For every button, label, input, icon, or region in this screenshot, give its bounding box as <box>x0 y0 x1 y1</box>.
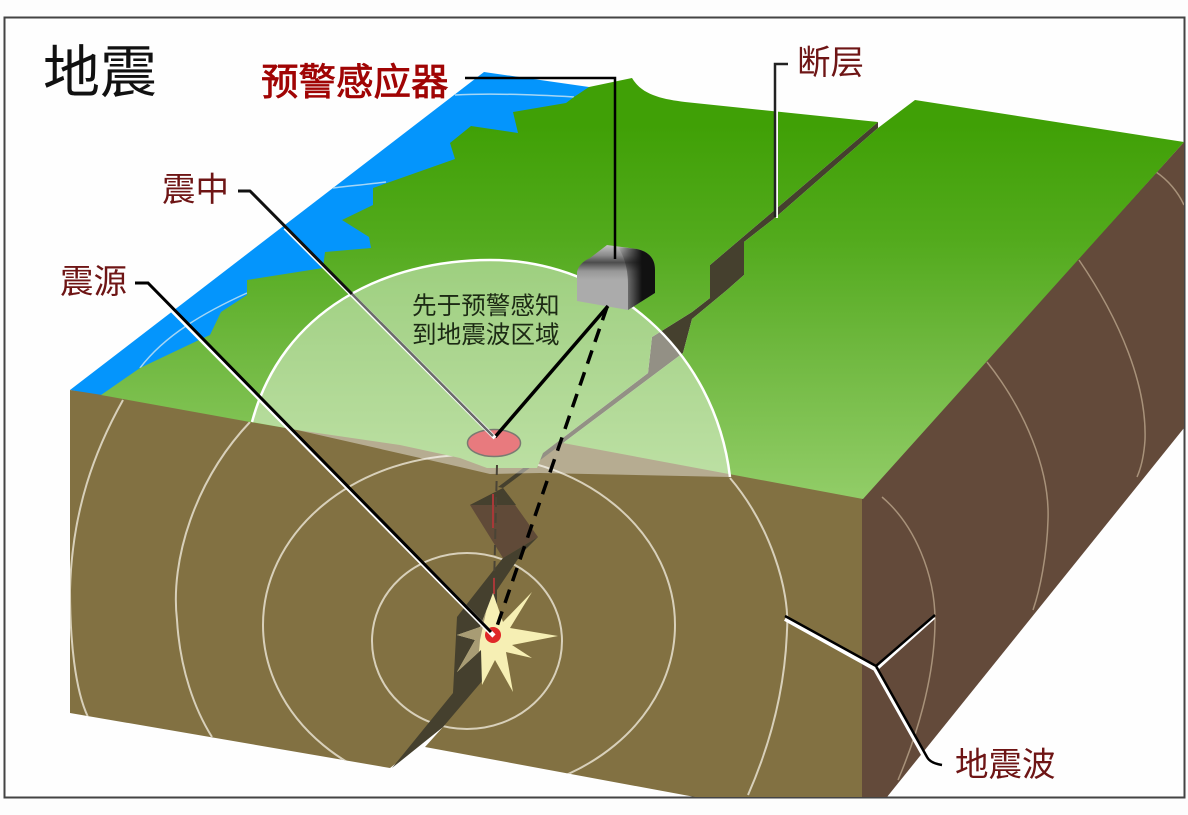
line: sensor to hypocentre dashed <box>495 307 607 632</box>
label: fault: 断层 <box>797 45 864 82</box>
panel: right ground surface <box>563 100 1184 499</box>
label: warning zone: 先于预警感知 <box>412 292 560 320</box>
hypocentre to epicentre projection <box>493 465 497 625</box>
panel: front soil face <box>70 390 862 797</box>
seismic waves on front face <box>70 400 787 795</box>
fault wall on surface <box>498 122 878 488</box>
leader: hypocentre <box>135 283 494 636</box>
epicentre marker <box>468 430 520 456</box>
leader: fault <box>775 64 788 218</box>
label: hypocentre: 震源 <box>60 264 127 301</box>
panel: right soil face <box>862 142 1184 797</box>
fault plane underground <box>392 488 538 768</box>
label: warning zone <box>412 292 560 349</box>
leader: epicentre <box>238 191 495 438</box>
leader: seismic waves <box>785 615 942 765</box>
title: 地震 <box>43 41 157 105</box>
warning zone dome <box>252 260 730 477</box>
line: sensor to epicentre <box>495 306 608 437</box>
sea wave arcs <box>140 94 574 368</box>
panel: left ground surface <box>101 78 878 468</box>
leader: sensor <box>465 78 615 259</box>
label: warning zone: 到地震波区域 <box>412 321 560 349</box>
label: epicentre: 震中 <box>162 172 229 209</box>
seismic waves on right face <box>882 172 1184 780</box>
icon: warning sensor <box>577 245 655 310</box>
label: seismic waves: 地震波 <box>955 747 1056 784</box>
label: sensor: 预警感应器 <box>261 61 448 103</box>
burst: hypocentre <box>457 592 558 692</box>
panel: sea <box>70 72 589 420</box>
